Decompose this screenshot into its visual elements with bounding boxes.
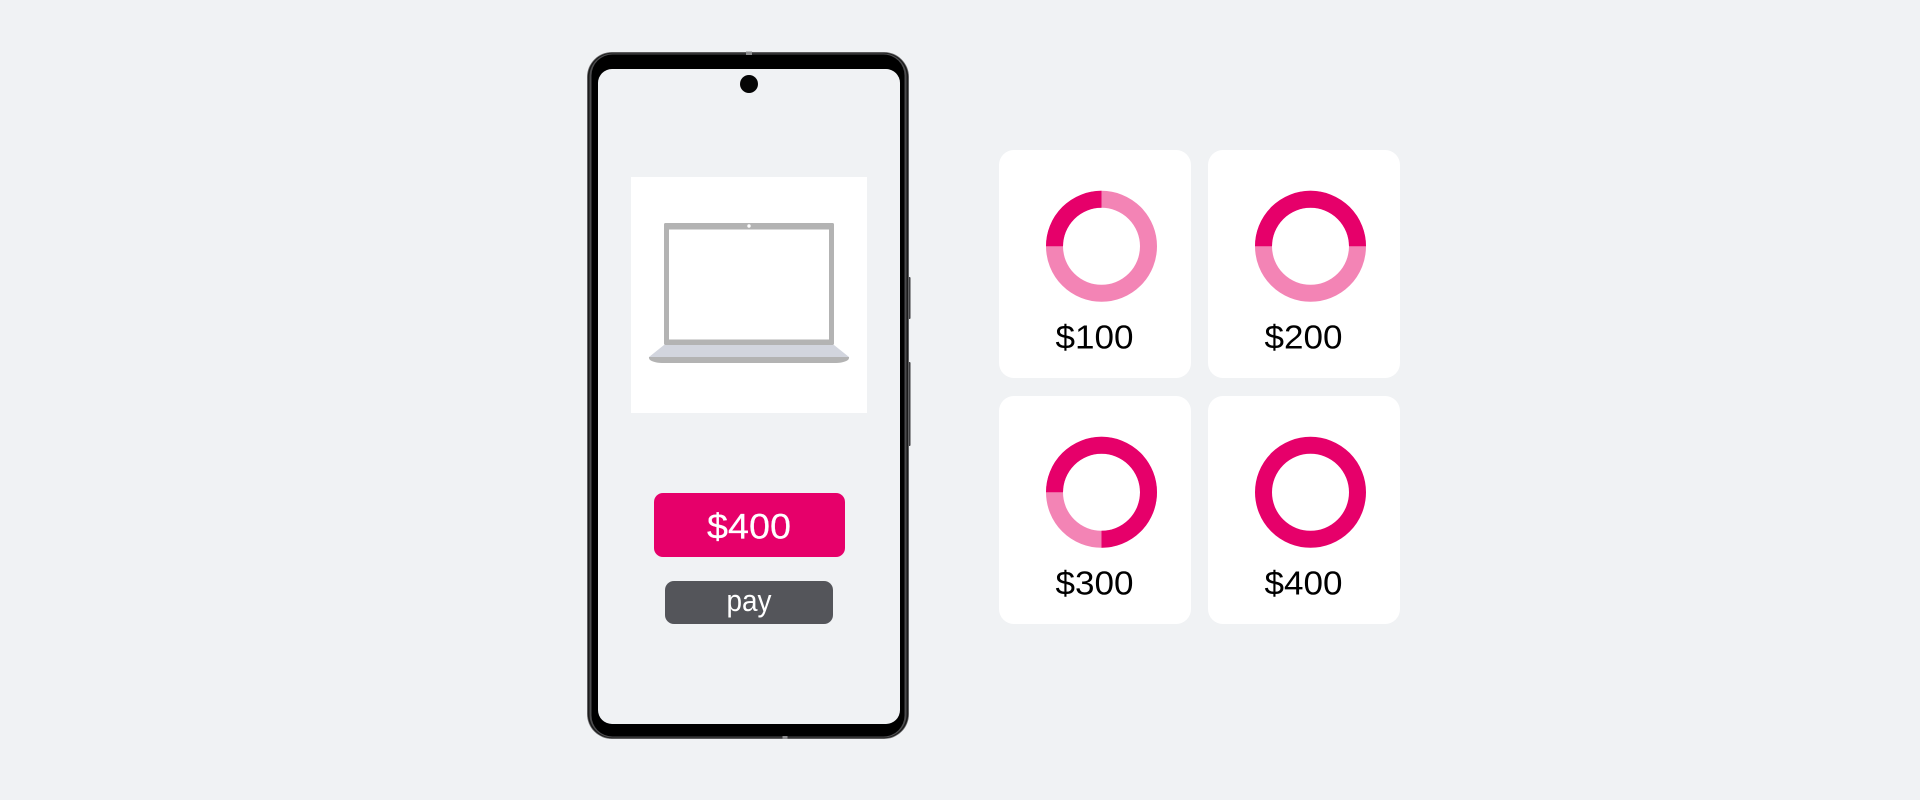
- phone screen: [598, 69, 900, 724]
- phone antenna notches: [746, 52, 788, 739]
- laptop keyboard base: [649, 345, 849, 357]
- panel: $200 installment: [1208, 150, 1400, 378]
- phone side buttons: [907, 277, 910, 446]
- laptop lid: [664, 223, 834, 345]
- icon: front camera: [740, 75, 758, 93]
- image background: [631, 177, 867, 413]
- pay button: pay: [726, 583, 772, 618]
- donut: 50 percent paid: [1264, 199, 1358, 293]
- phone body: [587, 52, 909, 739]
- amount label: $200: [1264, 320, 1342, 356]
- phone: [587, 52, 910, 739]
- panel: $400 installment: [1208, 396, 1400, 624]
- laptop front edge: [649, 357, 849, 363]
- price button: $400: [707, 508, 791, 546]
- product image: laptop: [631, 177, 867, 413]
- amount label: $400: [1264, 566, 1342, 602]
- amount label: $300: [1056, 566, 1134, 602]
- donut: 25 percent paid: [1054, 199, 1148, 293]
- pay button: [665, 581, 833, 624]
- laptop webcam: [747, 224, 751, 228]
- donut: 100 percent paid: [1264, 445, 1358, 539]
- laptop display: [669, 230, 829, 340]
- panel: $300 installment: [999, 396, 1191, 624]
- price button: [654, 493, 845, 557]
- donut: 75 percent paid: [1054, 445, 1148, 539]
- panel: $100 installment: [999, 150, 1191, 378]
- amount label: $100: [1056, 320, 1134, 356]
